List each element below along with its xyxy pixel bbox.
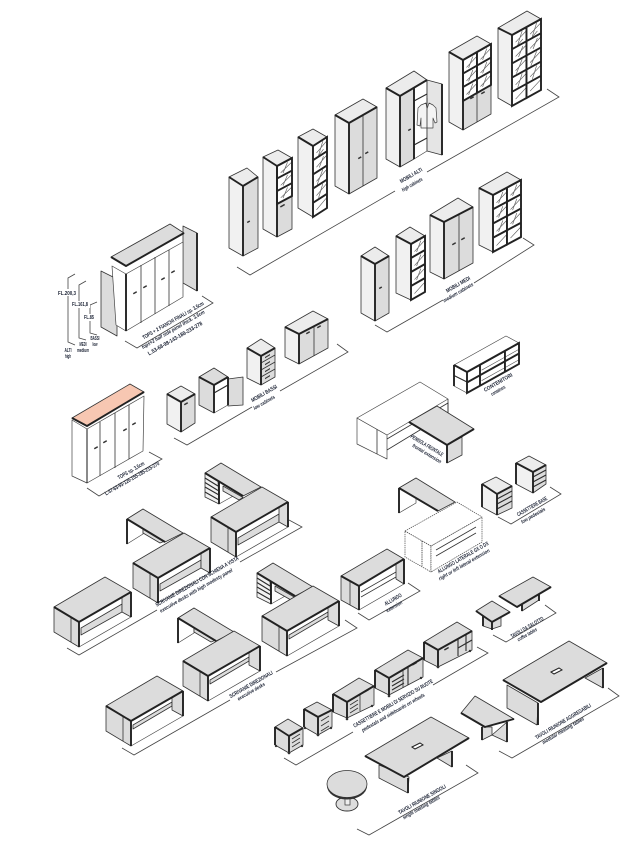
panel: modular meeting tables xyxy=(461,641,619,758)
desk xyxy=(54,577,131,647)
caption: scrivanie direzionali xyxy=(229,670,274,702)
bracket line xyxy=(237,191,395,275)
panel: executive desks xyxy=(106,563,357,755)
caption: tavoli da salotto: coffee tables xyxy=(516,627,539,643)
dimension: heights: FL.200,3 xyxy=(58,291,76,297)
heading: mobili bassi: low cabinets xyxy=(253,394,276,412)
panel: containers xyxy=(454,336,519,398)
caption: penisola frontale xyxy=(409,434,444,465)
caption: tops and end panels: tops+2 half side panel thick. 3,5cm xyxy=(141,309,206,351)
bracket line xyxy=(284,732,353,765)
cabinet: single door xyxy=(229,168,258,256)
cabinet: glass double xyxy=(479,172,521,252)
bracket line xyxy=(125,296,213,348)
panel: medium cabinets xyxy=(361,172,534,332)
panel: tops and end panels xyxy=(58,224,213,360)
cabinet: open shelves xyxy=(396,227,425,300)
sideboard d xyxy=(375,650,423,697)
table: large xyxy=(503,641,607,725)
dimension: heights: FL.85 xyxy=(84,315,94,321)
bracket line xyxy=(67,610,157,655)
panel: single meeting tables xyxy=(327,717,478,835)
panel: coffee tables xyxy=(476,577,556,643)
end panel: right xyxy=(183,226,197,291)
cabinet: double door low xyxy=(285,311,328,364)
caption: cassettiere e mobili: CASSETTIERE E MOBILI DI SERVIZIO SU RUOTE xyxy=(353,679,435,729)
bracket line xyxy=(499,688,619,758)
caption: allungo: ALLUNGO xyxy=(384,593,404,607)
dimension: heights: MEDI xyxy=(80,342,87,348)
top panel xyxy=(111,224,184,266)
table: round xyxy=(327,770,367,811)
caption: tops and end panels: TOPS + 2 FIANCHI FINALI sp. 3,5cm xyxy=(142,301,205,341)
dotted desk xyxy=(405,502,482,572)
dimension: heights: FL.161,8 xyxy=(72,302,88,308)
caption: tavoli da salotto xyxy=(510,616,545,643)
heading: mobili medi: medium cabinets xyxy=(442,282,475,304)
heading: contenitori: CONTENITORI xyxy=(483,372,514,394)
cabinet: open door xyxy=(199,368,243,413)
caption: tavoli riunione aggregabili: modular meeting tables xyxy=(541,716,586,746)
cabinet: drawers xyxy=(247,339,275,385)
panel: low cabinets xyxy=(167,311,348,445)
wardrobe body xyxy=(112,242,183,331)
caption: allungo laterale: ALLUNGO LATERALE GX O DX xyxy=(437,541,490,575)
gray return xyxy=(399,478,455,513)
desk xyxy=(106,676,183,746)
caption: cassettiere basse xyxy=(516,496,549,525)
table: trapezoid xyxy=(461,696,514,742)
dimension: heights: BASSI xyxy=(90,336,100,342)
bracket line xyxy=(493,605,556,642)
caption: penisola frontale: PENISOLA FRONTALE xyxy=(409,434,444,458)
caption: scrivanie direzionali: executive desks xyxy=(237,682,266,702)
pedestal b xyxy=(304,702,332,736)
pedestal xyxy=(516,456,546,493)
panel: executive desks with high modesty xyxy=(54,463,302,655)
caption: tops xyxy=(104,461,161,497)
caption: tavoli riunione singoli: single meeting tables xyxy=(402,795,441,821)
cabinet: open shelves xyxy=(298,129,327,217)
long table xyxy=(499,577,551,611)
bracket line xyxy=(174,407,252,445)
dimension: heights: medium xyxy=(77,348,89,354)
caption: tavoli riunione singoli: TAVOLI RIUNIONE SINGOLI xyxy=(398,784,448,816)
caption: tavoli riunione aggregabili: TAVOLI RIUNIONE AGGREGABILI xyxy=(535,703,593,741)
bracket line xyxy=(122,700,230,755)
cabinet: half glass xyxy=(263,150,292,237)
dimension: heights: low xyxy=(92,342,98,348)
bracket line xyxy=(498,487,561,524)
table: rectangular xyxy=(365,717,469,793)
cabinet: tall glass double xyxy=(498,11,541,106)
cabinet: double door xyxy=(430,198,473,279)
extension top xyxy=(409,406,474,463)
bracket line xyxy=(375,300,443,332)
dimension: heights xyxy=(58,274,100,360)
caption: scrivanie direzionali: SCRIVANIE DIREZIONALI xyxy=(229,670,274,700)
caption: tops and end panels: L.53-68-98-143-188-233-278 xyxy=(147,321,204,357)
caption: allungo: extension xyxy=(385,600,404,614)
end panel: left xyxy=(101,271,117,336)
panel: high cabinets xyxy=(229,11,559,275)
desk with return xyxy=(178,608,260,701)
bracket line xyxy=(87,452,162,496)
desk with pedestal return xyxy=(257,563,339,656)
icon: jacket xyxy=(417,98,437,128)
pedestal a xyxy=(275,719,303,754)
small table xyxy=(476,601,510,630)
panel: coloured top wardrobe xyxy=(72,384,162,497)
caption: cassettiere e mobili: pedestals and sideboards on wheels xyxy=(360,692,426,734)
heading: mobili alti: MOBILI ALTI xyxy=(399,167,424,185)
caption: penisola frontale: frontal extension xyxy=(411,443,442,465)
top: highlighted xyxy=(72,384,144,426)
caption: tops: TOPS sp. 3,5cm xyxy=(117,461,146,481)
heading: mobili medi: MOBILI MEDI xyxy=(445,276,472,294)
cabinet: double door xyxy=(335,99,377,194)
bracket line xyxy=(357,765,478,835)
sideboard c xyxy=(333,678,374,720)
panel: lateral extension xyxy=(399,478,491,582)
heading: mobili alti: high cabinets xyxy=(401,177,424,193)
panel: frontal extension desk xyxy=(357,382,474,465)
cabinet: single door xyxy=(361,247,389,321)
panel: pedestals and sideboards on wheels xyxy=(275,622,488,765)
bracket line xyxy=(358,583,420,620)
caption: cassettiere basse: low pedestals xyxy=(520,507,547,525)
sideboard e xyxy=(424,622,472,668)
cabinet: single door xyxy=(167,386,195,432)
panel: low pedestals xyxy=(482,456,561,525)
cabinet: glass and doors xyxy=(449,36,491,130)
caption: tops: L.47-63-93-125-155-185-215-270 xyxy=(104,461,161,497)
desk with pedestal return xyxy=(205,463,288,557)
desk with return xyxy=(127,509,210,603)
caption: allungo laterale: right or left lateral extension xyxy=(438,548,491,582)
dimension: heights: high xyxy=(65,354,71,360)
heading: contenitori xyxy=(483,372,514,398)
caption: allungo xyxy=(384,593,404,614)
panel: extension desk xyxy=(341,549,420,620)
caption: cassettiere basse: CASSETTIERE BASE xyxy=(516,496,549,518)
caption: scrivanie con schiena: SCRIVANIE DIREZIONALI CON SCHIENA A VISTA xyxy=(155,556,240,608)
dimension: heights: ALTI xyxy=(64,348,72,354)
heading: mobili bassi: MOBILI BASSI xyxy=(250,384,279,404)
pedestal xyxy=(482,477,512,515)
cabinet: open wardrobe with jacket xyxy=(386,71,442,167)
caption: scrivanie con schiena: executive desks with high modesty panel xyxy=(159,568,234,614)
heading: contenitori: containers xyxy=(490,385,507,398)
heading: mobili bassi xyxy=(250,384,279,412)
heading: mobili alti xyxy=(399,167,424,193)
caption: tavoli da salotto: TAVOLI DA SALOTTO xyxy=(510,616,545,640)
